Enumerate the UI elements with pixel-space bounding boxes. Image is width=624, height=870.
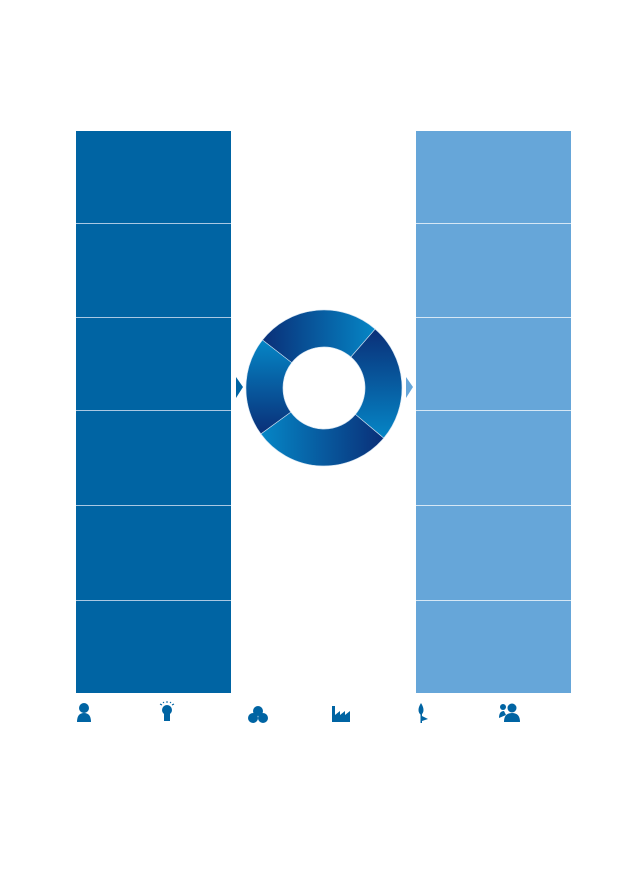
icon: lightbulb — [160, 701, 174, 721]
icon: people — [499, 704, 520, 722]
ring segment: top — [262, 310, 375, 363]
ring segment: bottom — [261, 412, 384, 466]
icon: person — [77, 703, 91, 722]
ring segment: right — [351, 329, 402, 438]
icon: plant — [418, 703, 428, 723]
arrow: left — [236, 377, 243, 398]
ring segment: left — [246, 340, 292, 434]
panel: left column — [76, 131, 231, 693]
icon: currency coins — [248, 706, 268, 723]
arrow: right — [406, 377, 413, 398]
panel: right column — [416, 131, 571, 693]
icon: factory — [332, 706, 350, 722]
